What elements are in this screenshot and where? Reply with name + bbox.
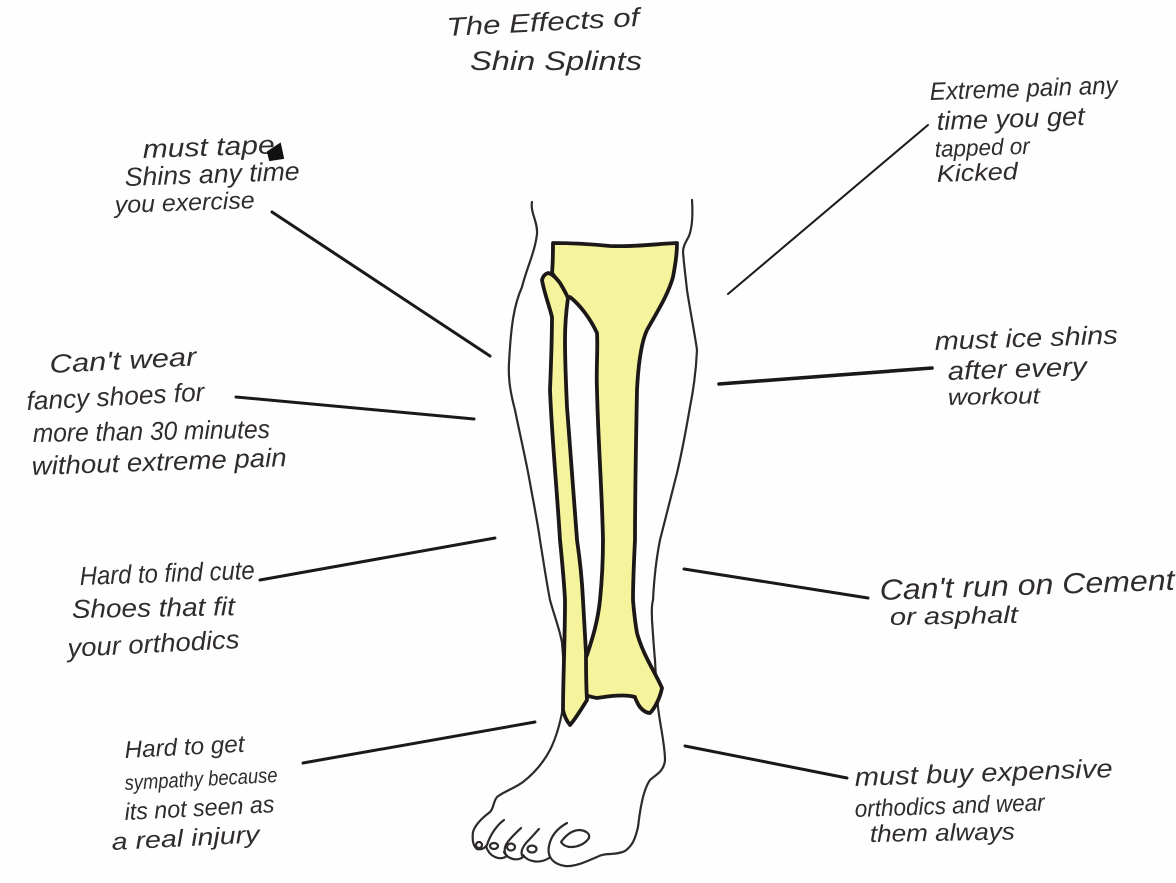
callout: extreme pain: Kicked: [936, 158, 1019, 188]
callout: ice shins: workout: [948, 382, 1042, 410]
tibia bone: [552, 243, 677, 713]
callout: cute shoes: Hard to find cute: [79, 555, 255, 591]
callout: cement: or asphalt: [890, 602, 1020, 631]
leg and foot outline: [473, 200, 697, 866]
callout: fancy shoes: [26, 341, 474, 481]
callout: sympathy: sympathy because: [124, 764, 278, 795]
toenail: big toe: [561, 830, 589, 847]
callout: cement: Can't run on Cement: [879, 565, 1176, 607]
callout: ice shins: [719, 320, 1118, 410]
callout: must tape shins: [112, 129, 490, 356]
title: The Effects of: [446, 2, 643, 42]
callout: must tape shins: must tape: [142, 129, 275, 164]
callout: sympathy: [111, 722, 535, 856]
callout: sympathy: a real injury: [111, 821, 262, 856]
fibula bone: [542, 273, 587, 725]
callout: cute shoes: [65, 538, 495, 663]
callout: orthodics: them always: [870, 818, 1015, 848]
callout: cute shoes: Shoes that fit: [72, 591, 237, 624]
callout: orthodics: orthodics and wear: [854, 789, 1046, 823]
callout: sympathy: Hard to get: [124, 731, 246, 764]
title: [446, 2, 643, 76]
callout: extreme pain: time you get: [936, 101, 1087, 136]
callout: extreme pain: tapped or: [934, 133, 1031, 162]
callout: fancy shoes: without extreme pain: [31, 442, 287, 481]
callout: sympathy: its not seen as: [124, 791, 275, 826]
callout: must tape shins: you exercise: [112, 187, 255, 219]
leg illustration: [473, 200, 697, 866]
scribble: [268, 144, 283, 160]
toes: [476, 820, 589, 862]
title: Shin Splints: [470, 46, 642, 76]
callout: fancy shoes: more than 30 minutes: [33, 414, 270, 448]
callout: extreme pain: [728, 71, 1120, 294]
callout: orthodics: must buy expensive: [854, 753, 1113, 792]
callout: must tape shins: Shins any time: [124, 156, 300, 192]
callout: extreme pain: Extreme pain any: [929, 71, 1120, 106]
callout: cute shoes: your orthodics: [65, 624, 240, 663]
callout: cement: [684, 565, 1176, 631]
callout: fancy shoes: Can't wear: [49, 341, 199, 379]
callout: orthodics: [685, 746, 1113, 848]
callout: ice shins: must ice shins: [934, 320, 1118, 356]
callout: fancy shoes: fancy shoes for: [26, 377, 206, 416]
callout: ice shins: after every: [947, 351, 1089, 386]
